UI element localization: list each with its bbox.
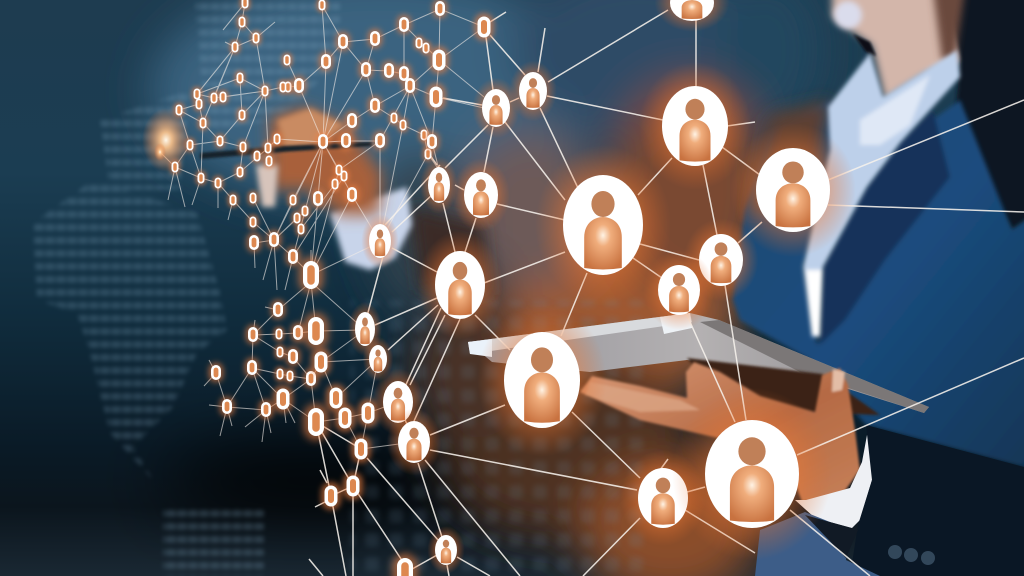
person node: upper right large	[639, 62, 751, 190]
person node: small mid	[420, 156, 458, 214]
person node: top edge	[655, 0, 729, 32]
person node: largest on hand	[672, 388, 832, 560]
person node: upper	[472, 78, 520, 138]
person node: bottom	[427, 526, 465, 574]
small person nodes, medium size	[216, 6, 440, 412]
person node: above tablet	[643, 250, 715, 330]
person node: lower left	[372, 368, 424, 436]
network connection lines: main web	[309, 10, 1024, 576]
person node: bottom small	[620, 450, 706, 546]
network connection lines: small mesh	[160, 3, 484, 449]
blurred screen squares	[350, 300, 650, 576]
woman: white shirt collar	[803, 50, 960, 337]
small person nodes, largest size	[311, 269, 405, 576]
person node: left of centre	[418, 231, 502, 339]
person node: lower mesh	[363, 337, 393, 381]
person node: lower	[387, 408, 441, 476]
tablet	[468, 313, 929, 415]
right hand holding tablet	[580, 362, 860, 502]
light flare at left of network	[142, 108, 190, 172]
woman: navy suit jacket	[733, 100, 1024, 470]
person node: far left white	[361, 214, 399, 268]
blurred writing hand with pen	[200, 107, 490, 295]
person node: upper right	[509, 61, 557, 121]
woman: hair and neck	[832, 0, 1024, 230]
dotted world map, blurred	[33, 0, 340, 576]
person node: left mid	[348, 302, 382, 356]
person node: beside center	[684, 218, 758, 302]
person node: large center	[535, 145, 671, 305]
person node: over tablet	[477, 303, 607, 457]
jacket sleeve with buttons	[755, 425, 1024, 576]
small person nodes, tiny size	[175, 1, 428, 378]
person node: right large	[730, 123, 856, 257]
small person nodes, larger size	[283, 23, 484, 500]
shirt cuff	[795, 435, 873, 528]
person node: mid	[452, 158, 510, 232]
